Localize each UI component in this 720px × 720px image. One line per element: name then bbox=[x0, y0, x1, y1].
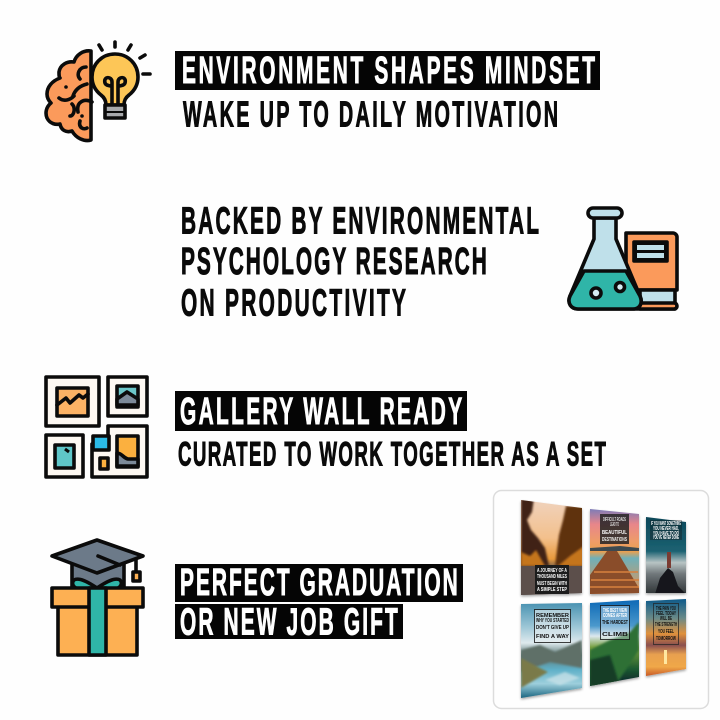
poster: journey: A SIMPLE STEP bbox=[537, 587, 568, 593]
poster: remember bbox=[521, 603, 582, 698]
poster: the best view: COMES AFTER bbox=[603, 613, 627, 619]
poster: the pain you feel today: THE STRENGTH bbox=[655, 622, 677, 628]
text block: environmental psychology research: ON PRODUCTIVITY bbox=[181, 282, 406, 324]
poster: the best view: CLIMB bbox=[602, 632, 629, 638]
poster: remember: FIND A WAY bbox=[536, 634, 570, 640]
poster: the pain you feel today: THE PAIN YOU bbox=[656, 606, 676, 612]
poster: the best view: THE BEST VIEW bbox=[603, 608, 627, 614]
poster: if you want something: YOU'VE NEVER DONE bbox=[653, 535, 679, 541]
poster: remember: WHY YOU STARTED bbox=[536, 618, 569, 624]
subheading: wake up to daily motivation: WAKE UP TO DAILY MOTIVATION bbox=[183, 96, 558, 135]
poster: the pain you feel today: YOU FEEL bbox=[658, 629, 674, 635]
poster: the pain you feel today: WILL BE bbox=[660, 616, 672, 622]
heading: environment shapes mindset: ENVIRONMENT SHAPES MINDSET bbox=[182, 50, 595, 92]
poster: difficult roads: BEAUTIFUL bbox=[602, 530, 627, 536]
poster: if you want something bbox=[646, 517, 686, 594]
poster: journey: MUST BEGIN WITH bbox=[537, 581, 567, 587]
poster: if you want something: YOU NEVER HAD, bbox=[653, 526, 679, 532]
poster: the pain you feel today: TOMORROW bbox=[656, 636, 676, 642]
poster: the best view: THE HARDEST bbox=[602, 620, 628, 626]
text block: environmental psychology research: BACKED BY ENVIRONMENTAL bbox=[181, 200, 539, 242]
poster: journey bbox=[521, 498, 584, 596]
poster: remember: REMEMBER bbox=[536, 613, 569, 619]
icon: flask and book bbox=[569, 208, 677, 309]
heading: or new job gift: OR NEW JOB GIFT bbox=[180, 601, 398, 643]
heading: perfect graduation: PERFECT GRADUATION bbox=[180, 562, 458, 604]
icon: gallery wall frames bbox=[46, 377, 147, 477]
subheading: curated set: CURATED TO WORK TOGETHER AS A SET bbox=[178, 435, 606, 473]
poster: difficult roads bbox=[590, 509, 640, 595]
poster: if you want something: IF YOU WANT SOMETHING bbox=[651, 521, 681, 527]
poster: remember: DON'T GIVE UP bbox=[536, 625, 570, 631]
poster: difficult roads: LEAD TO bbox=[610, 522, 619, 528]
poster: journey: THOUSAND MILES bbox=[537, 574, 567, 580]
text block: environmental psychology research bbox=[181, 200, 539, 324]
poster: difficult roads: DIFFICULT ROADS bbox=[603, 517, 626, 523]
poster: journey: A JOURNEY OF A bbox=[537, 568, 567, 574]
icon: brain and light bulb bbox=[46, 42, 150, 141]
poster: the best view bbox=[590, 600, 639, 686]
icon: graduation cap on gift box bbox=[52, 540, 143, 655]
poster: the pain you feel today: FEEL TODAY bbox=[656, 611, 676, 617]
poster: difficult roads: DESTINATIONS bbox=[602, 537, 627, 543]
poster: if you want something: YOU HAVE TO DO bbox=[653, 531, 679, 537]
heading: gallery wall ready: GALLERY WALL READY bbox=[180, 391, 462, 433]
panel: poster set product card bbox=[494, 490, 708, 708]
text block: environmental psychology research: PSYCHOLOGY RESEARCH bbox=[181, 241, 487, 283]
poster: the pain you feel today bbox=[646, 599, 686, 676]
